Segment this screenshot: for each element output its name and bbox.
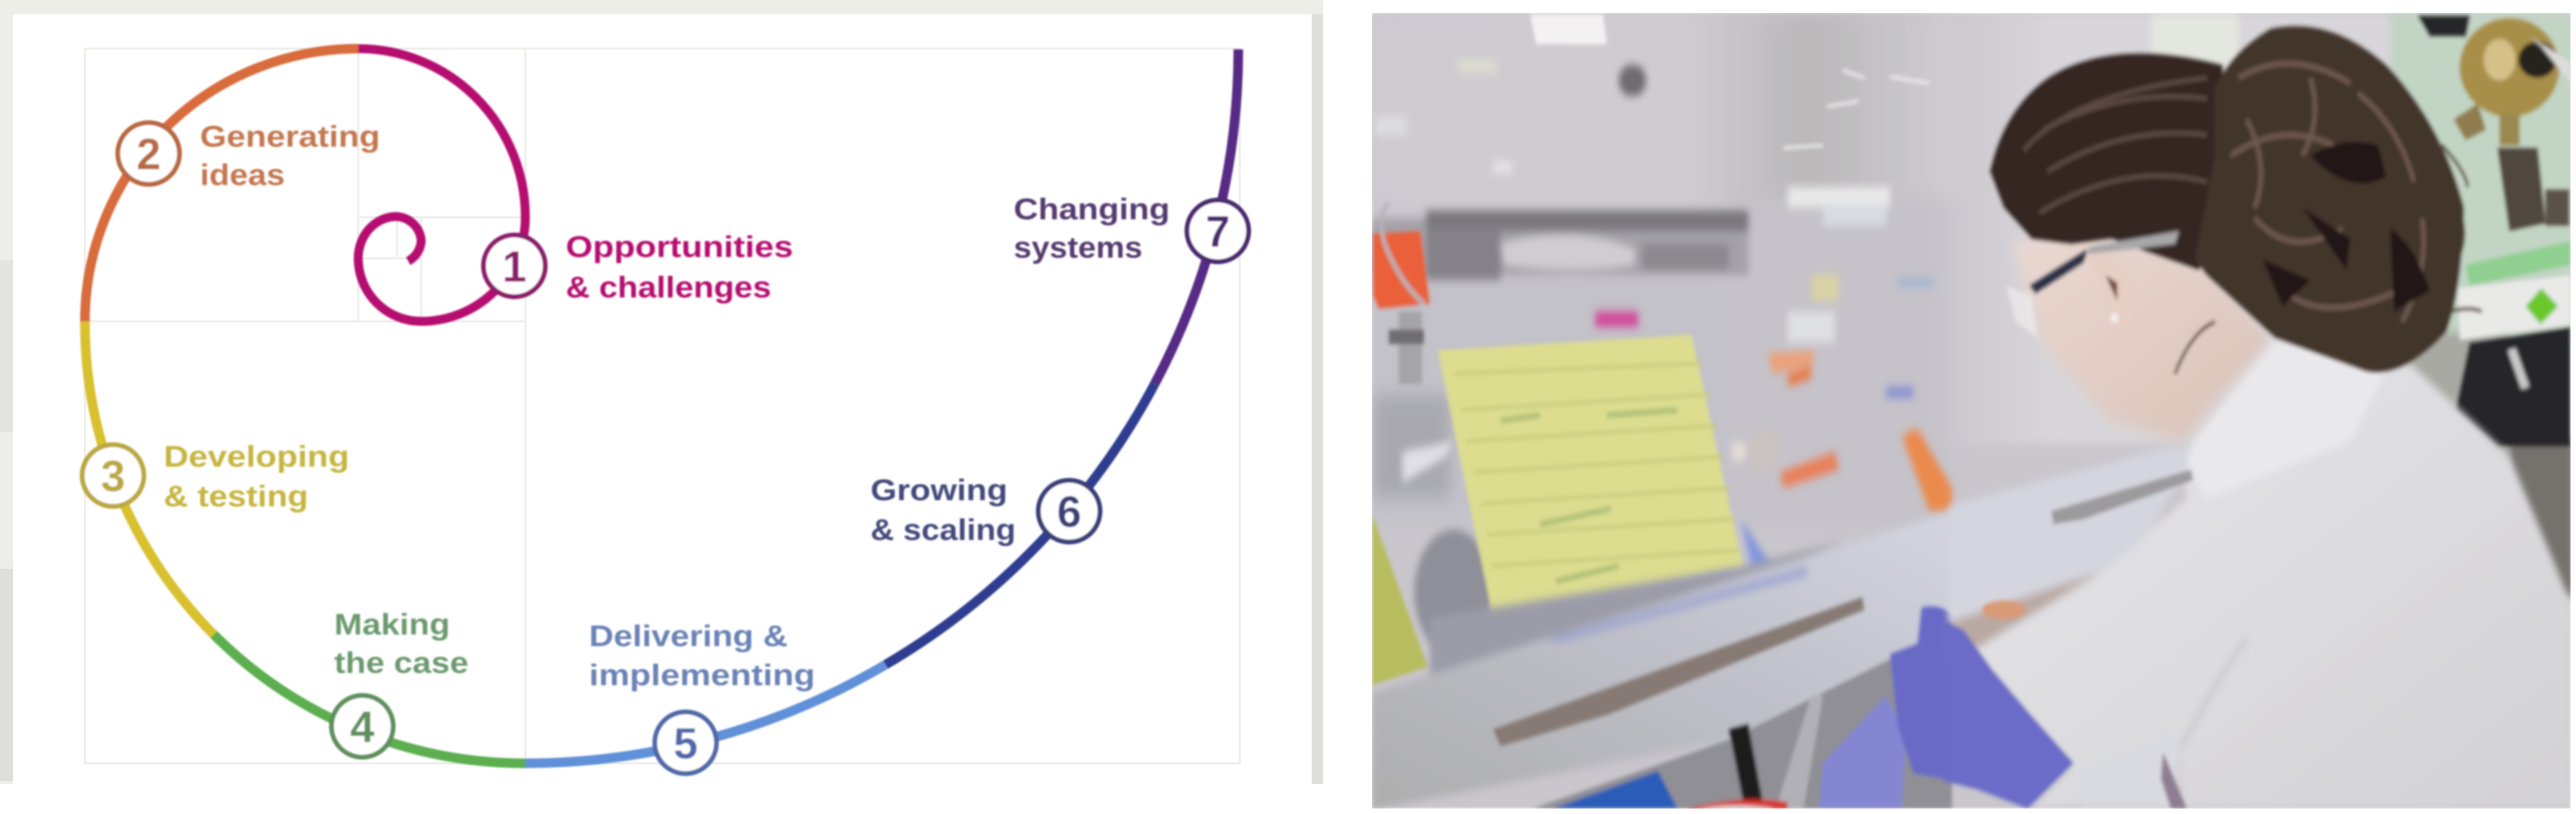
spiral segment: opportunities [358, 49, 525, 321]
photo: fume hood interior, left half [1372, 13, 1957, 810]
label: generating ideas: Generating [200, 120, 380, 153]
gas regulator [2418, 16, 2470, 36]
green shelf and label [2466, 241, 2571, 286]
label: growing and scaling: Growing [871, 473, 1008, 507]
marker 3: 3 [101, 452, 125, 501]
lab coat [1964, 340, 2571, 809]
sash handle [1493, 597, 1864, 746]
panel: spiral diagram frame [0, 0, 1323, 784]
label: delivering and implementing: implementing [589, 658, 815, 692]
spiral segment: developing [85, 321, 214, 634]
sharp scratches on glass [1784, 70, 1929, 148]
orange clamp [1373, 231, 1430, 309]
label: delivering and implementing: Delivering & [589, 619, 788, 653]
white ceiling light [1530, 14, 1607, 44]
spiral segment: delivering [525, 665, 886, 763]
label: changing systems: Changing [1014, 193, 1170, 226]
label: delivering and implementing [589, 619, 815, 692]
spiral segment: changing systems [1155, 49, 1238, 384]
red rim [1686, 800, 1788, 810]
ponytail [2195, 26, 2464, 372]
label: making the case: the case [334, 646, 468, 680]
label: growing and scaling [871, 473, 1016, 547]
pipe [2498, 148, 2545, 231]
neck and face [2012, 228, 2271, 441]
green note [1372, 514, 1428, 685]
label: growing and scaling: & scaling [871, 513, 1016, 547]
label: changing systems: systems [1014, 231, 1142, 264]
area below sash [1534, 658, 1954, 809]
ear [2090, 252, 2137, 327]
black gas cylinder [2455, 327, 2571, 447]
marker 1 [484, 235, 545, 297]
spiral segment: making the case [214, 634, 525, 763]
photo: scientist at a fume hood [1372, 13, 2573, 810]
glove [1944, 620, 2073, 809]
label: developing and testing: & testing [164, 480, 308, 513]
yellow note [1438, 335, 1742, 618]
sash panel [1372, 511, 1952, 810]
safety glasses [2088, 231, 2179, 254]
blue gloves [1819, 695, 1905, 809]
spiral segment: generating ideas [85, 49, 358, 321]
spiral segment: growing [886, 384, 1155, 665]
label: opportunities and challenges: & challenges [566, 271, 771, 304]
front hair [1990, 53, 2223, 270]
label: opportunities and challenges: Opportunities [566, 230, 793, 264]
marker 5: 5 [673, 719, 698, 768]
label: opportunities and challenges [566, 230, 793, 304]
lower grey area [1427, 543, 1832, 677]
blue container [1552, 771, 1677, 809]
golden-section grid [85, 49, 1240, 763]
marker 2 [118, 123, 179, 184]
marker 5 [655, 712, 716, 774]
marker 7 [1187, 200, 1249, 262]
marker 6 [1038, 480, 1100, 542]
marker 4: 4 [350, 702, 375, 752]
marker 7: 7 [1205, 207, 1230, 256]
label: developing and testing [164, 440, 349, 513]
label: making the case [334, 608, 468, 680]
label: generating ideas [200, 120, 380, 192]
pen in pocket [2161, 753, 2187, 809]
stage markers [82, 123, 1249, 774]
marker 6: 6 [1057, 487, 1081, 536]
label: making the case: Making [334, 608, 450, 641]
sash panel, right end [1948, 441, 2191, 623]
stage labels [164, 120, 1170, 692]
label: developing and testing: Developing [164, 440, 349, 473]
marker 4 [332, 695, 393, 757]
chart: innovation spiral [85, 49, 1238, 763]
label: generating ideas: ideas [200, 158, 285, 192]
marker 1: 1 [502, 242, 527, 291]
photo: scientist, right half [1920, 13, 2573, 809]
marker 3 [82, 445, 144, 506]
marker 2: 2 [136, 130, 161, 179]
label: changing systems [1014, 193, 1170, 264]
